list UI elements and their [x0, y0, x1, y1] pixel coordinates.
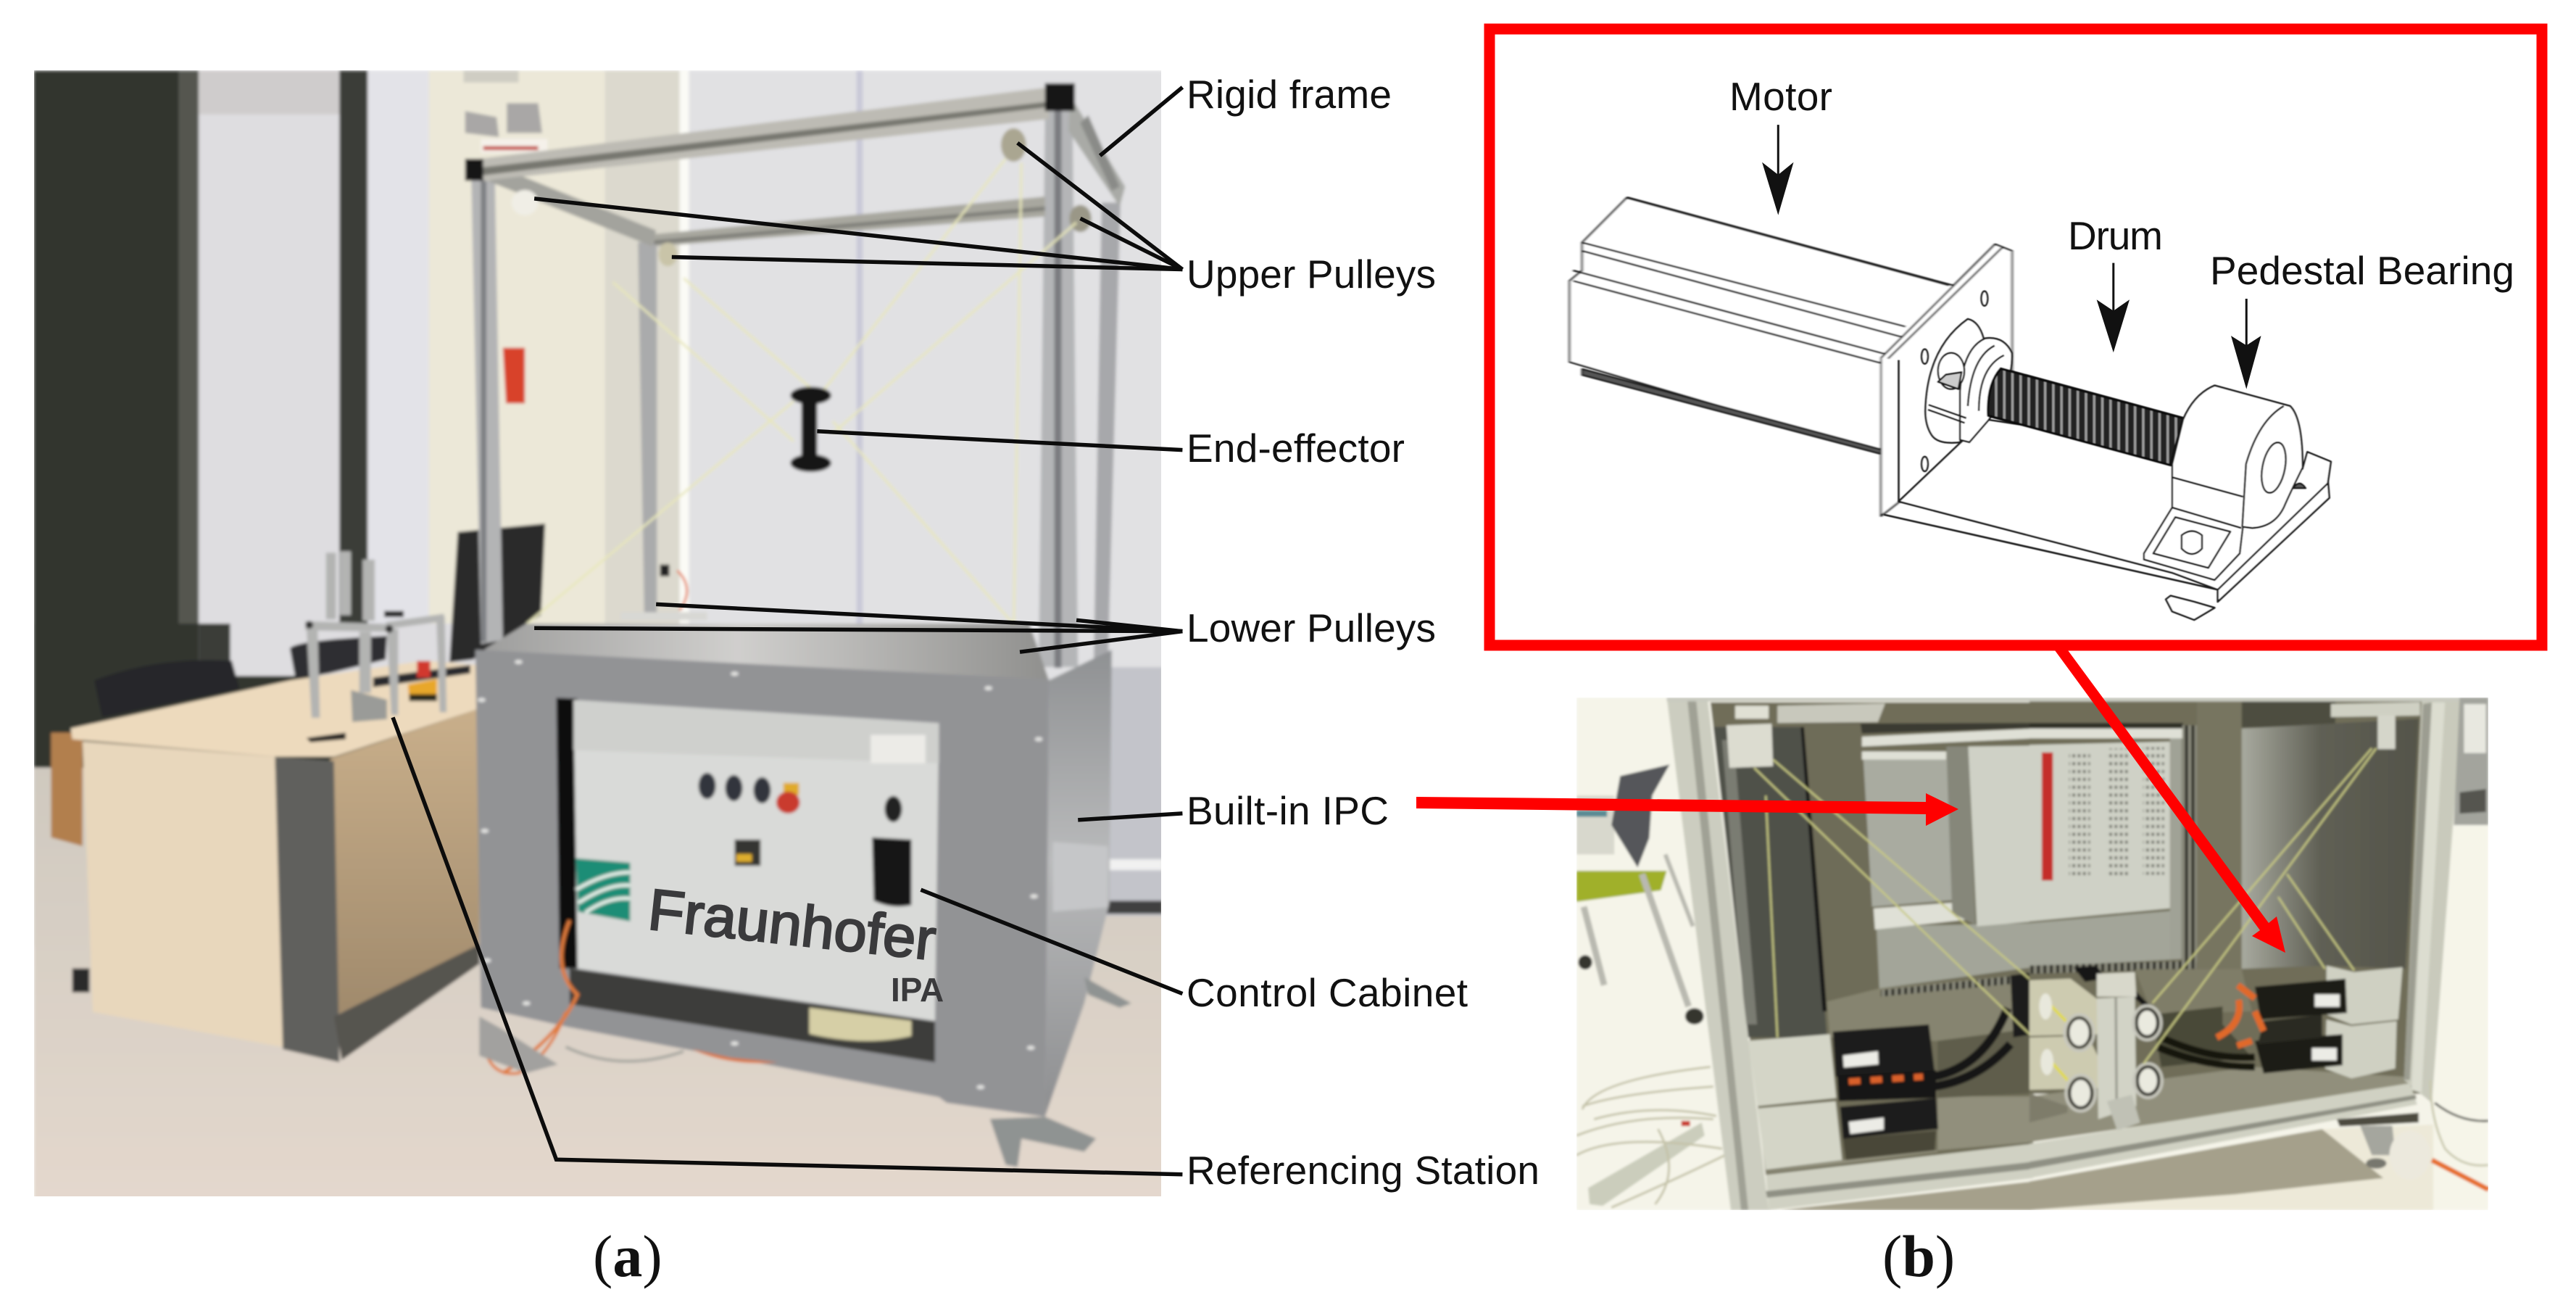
leader: referencing station: [393, 717, 1182, 1175]
leader: rigid frame: [1100, 87, 1182, 156]
label: upper pulleys: Upper Pulleys: [1187, 252, 1436, 297]
label: drum: Drum: [2068, 213, 2163, 258]
floor plate: [2029, 1067, 2409, 1142]
label: pedestal bearing: Pedestal Bearing: [2210, 248, 2514, 293]
label: rigid frame: Rigid frame: [1187, 72, 1392, 117]
upper right mount: [2331, 702, 2420, 717]
caption (a): (a): [593, 1223, 662, 1289]
front rail and post: [2404, 698, 2462, 1103]
red callout box with drum drawing: [1489, 29, 2542, 645]
label: motor: Motor: [1729, 74, 1832, 119]
label: end-effector: End-effector: [1187, 426, 1405, 471]
arrow: pedestal bearing: [2231, 299, 2261, 389]
motors: [1833, 1025, 1935, 1077]
arrow: drum: [2097, 263, 2130, 352]
right half of interior: [2029, 698, 2488, 1210]
arrows of the drawing: [1762, 125, 2261, 389]
base plate: [1885, 291, 2331, 620]
leader: control cabinet: [921, 890, 1182, 993]
left half of interior: [1576, 698, 2033, 1210]
collar, drum, bearing and base line drawing: [1885, 291, 2331, 620]
IPC plate: [2029, 742, 2170, 922]
labels for left photo: [1187, 72, 1540, 1193]
panel (a): photo of the cable robot: [34, 70, 1259, 1204]
label: built-in IPC: Built-in IPC: [1187, 788, 1389, 833]
Fraunhofer logo mark: [576, 858, 630, 922]
control cabinet: [475, 624, 1131, 1167]
upper mounts: [1727, 724, 1773, 768]
caption (b): (b): [1882, 1223, 1955, 1289]
red arrow: IPC to inside photo: [1416, 793, 1958, 826]
arrow: motor: [1762, 125, 1794, 215]
threaded drum: [1988, 368, 2183, 465]
IPC plate left part: [1968, 745, 2033, 927]
leader lines for left photo: [393, 87, 1182, 1175]
frame: upper structure and pulleys: [465, 83, 1125, 668]
label: lower pulleys: Lower Pulleys: [1187, 605, 1436, 650]
yellow cables: [1754, 760, 2033, 1038]
label: control cabinet: Control Cabinet: [1187, 970, 1468, 1015]
centre pulley block: [2074, 966, 2106, 982]
leader: built-in IPC: [1078, 814, 1182, 820]
end-effector: [791, 386, 831, 472]
label: referencing station: Referencing Station: [1187, 1148, 1540, 1193]
collar: [1925, 319, 2012, 443]
floor shadow: [2029, 1129, 2383, 1210]
referencing station and emergency stop: [290, 551, 470, 722]
chair, floor clutter: [1576, 795, 1614, 854]
panel (a): photo of the cable robot: Fraunhofer: [645, 877, 939, 972]
monitor: [449, 523, 545, 662]
red arrow: drum box to motors: [2055, 650, 2285, 953]
floor plate: [1766, 1096, 2033, 1173]
side boxes: [1748, 1034, 1836, 1106]
leader: lower pulleys: [534, 604, 1182, 652]
pedestal bearing: [2144, 386, 2306, 580]
aluminium frame post and rail: [1667, 698, 1769, 1210]
interior walls: [1711, 703, 2033, 1175]
background wall and floor: [34, 70, 1161, 667]
caster: [2337, 1113, 2419, 1127]
desk: [71, 661, 479, 1062]
leader: end-effector: [817, 431, 1182, 450]
right motors: [2255, 979, 2347, 1019]
right wall shading: [2242, 719, 2419, 969]
right side boxes: [2327, 966, 2403, 1025]
panel (a): photo of the cable robot: IPA: [891, 971, 944, 1009]
leader: upper pulleys: [534, 143, 1182, 270]
far right background: [2454, 698, 2488, 825]
panel (b): photo of the cabinet interior: [1576, 698, 2488, 1210]
yellow cables, right: [2143, 748, 2376, 1064]
motor body and bracket plate line drawing: [1570, 198, 2012, 516]
